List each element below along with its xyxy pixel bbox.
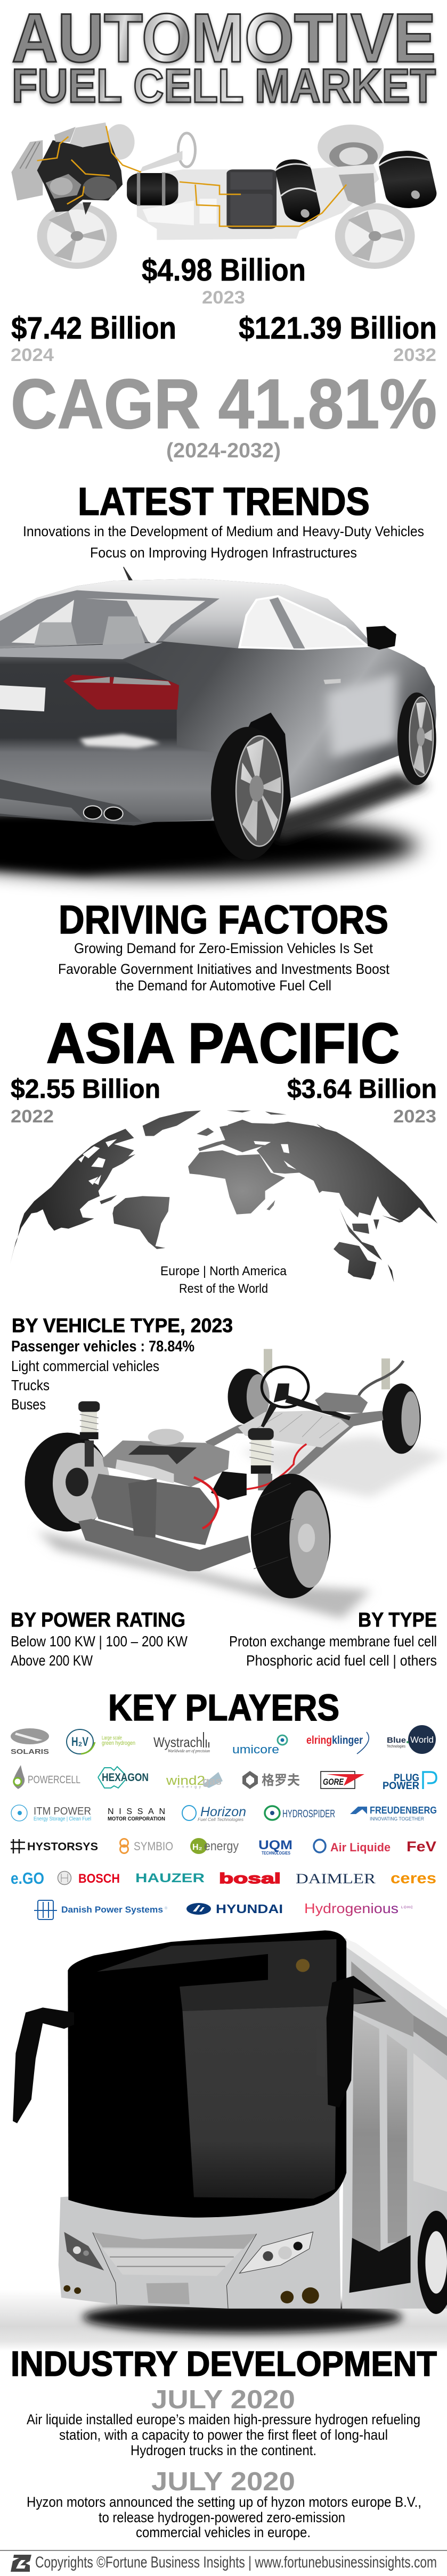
Asia Pacific 2022 value — [11, 1074, 160, 1127]
heading: driving factors: DRIVING FACTORS — [59, 897, 388, 942]
logo: Hystorsys: HYSTORSYS — [27, 1841, 98, 1853]
logo: Wystrach: Worldwide art of precision — [168, 1749, 210, 1753]
logo: Gore: GORE — [323, 1777, 344, 1787]
roof edge — [346, 1939, 447, 2018]
front wheel — [397, 692, 436, 785]
panel: by power rating: Above 200 KW — [11, 1652, 93, 1669]
wheel arch — [225, 712, 291, 841]
logo: wind2gas: wind2 — [166, 1774, 205, 1788]
logo: ElringKlinger — [306, 1732, 369, 1754]
trunk highlight — [0, 643, 162, 659]
logo: ITM Power — [11, 1805, 91, 1822]
logo: wind2gas — [166, 1772, 223, 1789]
illustration: bus — [13, 1931, 447, 2314]
Asia Pacific 2022 value: $2.55 Billion — [11, 1074, 160, 1104]
CAGR: (2024-2032) — [166, 439, 281, 462]
logo: Hauzer: HAUZER — [135, 1871, 205, 1885]
door highlight — [328, 672, 397, 758]
market size 2024: $7.42 Billion — [11, 311, 176, 346]
radiator — [11, 140, 43, 201]
frame rails — [205, 1411, 384, 1476]
panel: by vehicle type: Light commercial vehicles — [11, 1358, 159, 1374]
logo: Hyundai — [186, 1902, 283, 1916]
logo: Hyundai: HYUNDAI — [216, 1902, 283, 1916]
back right wheel — [382, 1383, 421, 1454]
logo: Nissan: NISSAN — [108, 1807, 165, 1816]
Arctic islands — [226, 1111, 331, 1132]
door handle — [323, 679, 340, 684]
latest trends list — [23, 523, 424, 561]
hydrogen tank: rear — [376, 149, 440, 210]
left mirror — [13, 2007, 74, 2123]
lower bumper — [0, 779, 143, 822]
body — [0, 579, 436, 825]
logo: Hystorsys — [11, 1839, 98, 1853]
logo: Freudenberg: FREUDENBERG — [370, 1805, 437, 1816]
left headlight — [64, 2232, 104, 2270]
rear wheel — [211, 727, 285, 860]
grille — [93, 2233, 257, 2276]
hose — [358, 1361, 403, 1400]
logo: Symbio: SYMBIO — [134, 1840, 173, 1853]
windshield reflection — [182, 2006, 336, 2198]
driving factors list: Favorable Government Initiatives and Investments Boost — [58, 961, 389, 977]
logo: ITM Power: Energy Storage | Clean Fuel — [34, 1816, 91, 1822]
development: July 2020 Air Liquide: Hydrogen trucks in the continent. — [131, 2442, 316, 2458]
Southeast Asia islands — [339, 1208, 403, 1260]
floor ribs — [257, 1413, 339, 1438]
panel: by type: BY TYPE — [358, 1609, 437, 1631]
floor plate — [238, 1411, 349, 1448]
logo: Wystrach: Wystrach — [153, 1734, 202, 1750]
logo: Plug Power: PLUG — [394, 1773, 419, 1784]
market size 2023: 2023 — [202, 288, 245, 308]
driving factors list: the Demand for Automotive Fuel Cell — [116, 978, 331, 994]
market size 2024: 2024 — [11, 345, 54, 365]
logo: Daimler: DAIMLER — [296, 1871, 376, 1886]
logo: H2 energy: H₂ — [192, 1843, 202, 1852]
rear window — [0, 590, 220, 646]
steering wheel — [261, 1367, 351, 1428]
logo: Bosal: bosal — [219, 1870, 281, 1886]
inland seas — [254, 1141, 297, 1170]
lower front body — [59, 2176, 344, 2309]
motor frame — [78, 1519, 251, 1571]
frame — [137, 164, 379, 240]
Asia Pacific 2023 value — [287, 1074, 437, 1127]
panel: by power rating — [11, 1609, 188, 1669]
Greenland — [143, 1111, 201, 1136]
antenna — [124, 567, 134, 600]
bus ground shadow — [0, 2290, 447, 2351]
wheel — [418, 2211, 447, 2314]
logo: Horizon: Horizon — [200, 1804, 246, 1819]
logo: UQM Technologies: UQM — [258, 1838, 292, 1852]
logo: ElringKlinger: elringklinger — [306, 1734, 363, 1746]
logo: Grove — [242, 1771, 300, 1789]
illustration: electric chassis — [25, 1349, 447, 1619]
logo: Danish Power Systems: Danish Power Systems — [61, 1905, 163, 1915]
red cables — [194, 1444, 306, 1529]
logo: Hydrospider — [265, 1806, 335, 1820]
logo: Ceres: ceres — [391, 1870, 436, 1887]
logo: Nissan — [108, 1807, 165, 1822]
logo: Solaris: SOLARIS — [11, 1748, 49, 1755]
development: July 2020 Hyzon: to release hydrogen-powered zero-emission — [99, 2509, 345, 2525]
regions list: Europe | North America — [160, 1264, 287, 1278]
logo: Freudenberg: INNOVATING TOGETHER — [370, 1816, 424, 1822]
logo: H2V: H₂V — [71, 1735, 88, 1749]
New Zealand — [388, 1265, 394, 1282]
development: July 2020 Hyzon — [27, 2467, 421, 2540]
logo: Danish Power Systems — [34, 1900, 168, 1919]
logo: Hydrogenious: Hydrogenious — [304, 1900, 399, 1916]
market size 2023 — [142, 253, 306, 308]
logo: PowerCell: POWERCELL — [28, 1774, 80, 1786]
logo: Hydrogenious: LOHC — [401, 1906, 413, 1909]
logo: Bosch — [58, 1871, 120, 1886]
panel: key player logos — [11, 1725, 437, 1919]
logo: Gore — [321, 1771, 364, 1789]
logo: ITM Power: ITM POWER — [34, 1806, 91, 1817]
panel: by vehicle type: Passenger vehicles : 78.84% — [11, 1338, 194, 1355]
logo: Hexagon: HEXAGON — [102, 1771, 149, 1784]
development: July 2020 Air Liquide: station, with a capacity to power the first fleet of long-haul — [59, 2427, 388, 2443]
engine top plate — [103, 1429, 230, 1487]
plate recess — [147, 2283, 190, 2304]
panel: by vehicle type: Buses — [11, 1396, 46, 1413]
panel: by type — [229, 1609, 437, 1669]
side window — [239, 596, 368, 649]
logo: Bosch: BOSCH — [78, 1872, 120, 1886]
logo: Umicore: umicore — [232, 1743, 279, 1756]
development: July 2020 Air Liquide: JULY 2020 — [151, 2385, 295, 2414]
back left wheel — [228, 1369, 270, 1425]
hydrogen tank: middle — [273, 158, 323, 224]
ground shadow — [37, 1435, 447, 1619]
market size 2032: 2032 — [393, 345, 436, 365]
door lower dark — [349, 2235, 411, 2293]
development: July 2020 Hyzon: JULY 2020 — [151, 2467, 295, 2496]
logo: Blue World: Blue — [387, 1736, 406, 1745]
Asia Pacific 2023 value: 2023 — [393, 1106, 436, 1127]
right mirror — [316, 1976, 386, 2107]
Africa — [188, 1150, 285, 1215]
orange hydrogen lines — [37, 126, 346, 226]
sun visor badge — [296, 1959, 310, 1972]
logo: Blue World — [387, 1725, 436, 1754]
logo: Nissan: MOTOR CORPORATION — [108, 1816, 165, 1822]
logo: Danish Power Systems: ® — [165, 1906, 168, 1910]
Madagascar — [266, 1200, 275, 1210]
rear deck and bumper — [0, 643, 231, 825]
illustration: world globe — [10, 1111, 437, 1282]
development: July 2020 Hyzon: commercial vehicles in europe. — [136, 2524, 311, 2540]
logo: Solaris — [11, 1728, 49, 1755]
logo: Horizon: Fuel Cell Technologies — [198, 1817, 243, 1822]
logo: H2 energy — [190, 1838, 239, 1854]
logo: Blue World: Technologies — [387, 1745, 405, 1749]
logo: Freudenberg — [350, 1805, 437, 1822]
market size 2032 — [239, 311, 437, 365]
logo: FEV: FeV — [407, 1839, 436, 1855]
logo: Air Liquide: Air Liquide — [330, 1841, 391, 1854]
front wheel — [37, 203, 117, 269]
Hudson Bay and lakes — [78, 1139, 117, 1185]
market size 2032: $121.39 Billion — [239, 311, 437, 346]
logo: H2V: Large scale — [102, 1735, 122, 1741]
panel: by vehicle type: Trucks — [11, 1377, 50, 1393]
latest trends list: Focus on Improving Hydrogen Infrastructures — [90, 545, 357, 561]
panel: by vehicle type: BY VEHICLE TYPE, 2023 — [12, 1315, 233, 1336]
heading: key players: KEY PLAYERS — [108, 1687, 339, 1728]
right headlight — [239, 2232, 313, 2273]
logo: Plug Power — [383, 1772, 436, 1792]
logo: e.GO: e.GO — [11, 1869, 44, 1888]
logo: Umicore — [232, 1735, 287, 1756]
motor cylinder — [91, 1474, 217, 1545]
logo: Grove: 格罗夫 — [262, 1773, 300, 1788]
regions list: Rest of the World — [179, 1282, 268, 1296]
license plate — [0, 685, 46, 711]
steering wheel — [140, 133, 196, 172]
windshield upper band — [97, 1939, 336, 2011]
panel: by power rating: Below 100 KW | 100 – 200 KW — [11, 1633, 188, 1650]
Caribbean — [100, 1195, 117, 1204]
fuel cell stack — [37, 122, 123, 215]
South America — [112, 1196, 169, 1249]
market size 2023: $4.98 Billion — [142, 253, 306, 288]
Asia Pacific 2022 value: 2022 — [11, 1106, 54, 1127]
heading: Asia Pacific: ASIA PACIFIC — [46, 1011, 400, 1075]
logo: wind2gas: energy — [177, 1785, 201, 1789]
logo: H2V — [67, 1729, 135, 1754]
driving factors list: Growing Demand for Zero-Emission Vehicles Is Set — [74, 940, 373, 956]
bumper reflection — [80, 734, 160, 748]
Australia — [334, 1242, 376, 1279]
door panels — [352, 2015, 407, 2252]
rear wheel — [335, 203, 415, 269]
logo: H2 energy: energy — [204, 1839, 239, 1853]
left suspension — [78, 1401, 100, 1466]
logo: Plug Power: POWER — [383, 1781, 419, 1792]
regions list — [160, 1264, 287, 1296]
logo: Symbio — [120, 1839, 173, 1853]
left front wheel — [25, 1433, 110, 1531]
fog lights — [63, 2285, 319, 2304]
heading: latest trends: LATEST TRENDS — [78, 480, 370, 523]
logo: H2V: green hydrogen — [102, 1740, 135, 1746]
logo: PowerCell — [13, 1765, 80, 1789]
illustration: fuel cell chassis — [11, 122, 440, 269]
far wheels — [105, 124, 384, 170]
bus side — [342, 1938, 447, 2309]
windshield — [68, 1931, 346, 2218]
tail light — [63, 675, 179, 710]
frame highlights — [143, 199, 217, 225]
market size 2024 — [11, 311, 176, 365]
rear power unit — [339, 173, 376, 207]
logo: wind2gas: gas — [202, 1776, 222, 1787]
development: July 2020 Air Liquide — [27, 2385, 420, 2458]
rear suspension rods — [264, 1349, 390, 1389]
logo: Blue World: World — [410, 1735, 434, 1745]
Asia Pacific 2023 value: $3.64 Billion — [287, 1074, 437, 1104]
illustration: grey sedan — [0, 567, 436, 876]
Scandinavia — [226, 1120, 254, 1134]
exhaust pipes — [84, 806, 123, 821]
ground shadow — [0, 772, 428, 876]
panel: by power rating: BY POWER RATING — [11, 1609, 185, 1631]
motor black parts — [211, 1471, 247, 1500]
panel seams — [93, 2233, 257, 2309]
panel: by vehicle type — [11, 1315, 233, 1413]
logo: Hexagon — [98, 1767, 149, 1788]
North America — [10, 1129, 135, 1265]
battery — [226, 169, 277, 229]
logo: Horizon — [182, 1804, 246, 1822]
battery cylinder — [315, 1392, 368, 1413]
side window lower — [413, 2053, 447, 2192]
roof — [0, 579, 368, 649]
centre suspension — [248, 1428, 274, 1490]
Eurasia — [198, 1122, 437, 1224]
side windows — [413, 2015, 447, 2056]
logo: UQM Technologies: TECHNOLOGIES — [262, 1851, 291, 1856]
driving factors list — [58, 940, 389, 994]
title — [12, 0, 436, 113]
front right wheel — [251, 1474, 331, 1598]
upper side window — [351, 1962, 413, 2037]
door mirror — [367, 626, 396, 650]
logo: Hydrospider: HYDROSPIDER — [282, 1808, 335, 1820]
hydrogen tank: centre — [127, 173, 178, 206]
British Isles — [197, 1128, 214, 1136]
